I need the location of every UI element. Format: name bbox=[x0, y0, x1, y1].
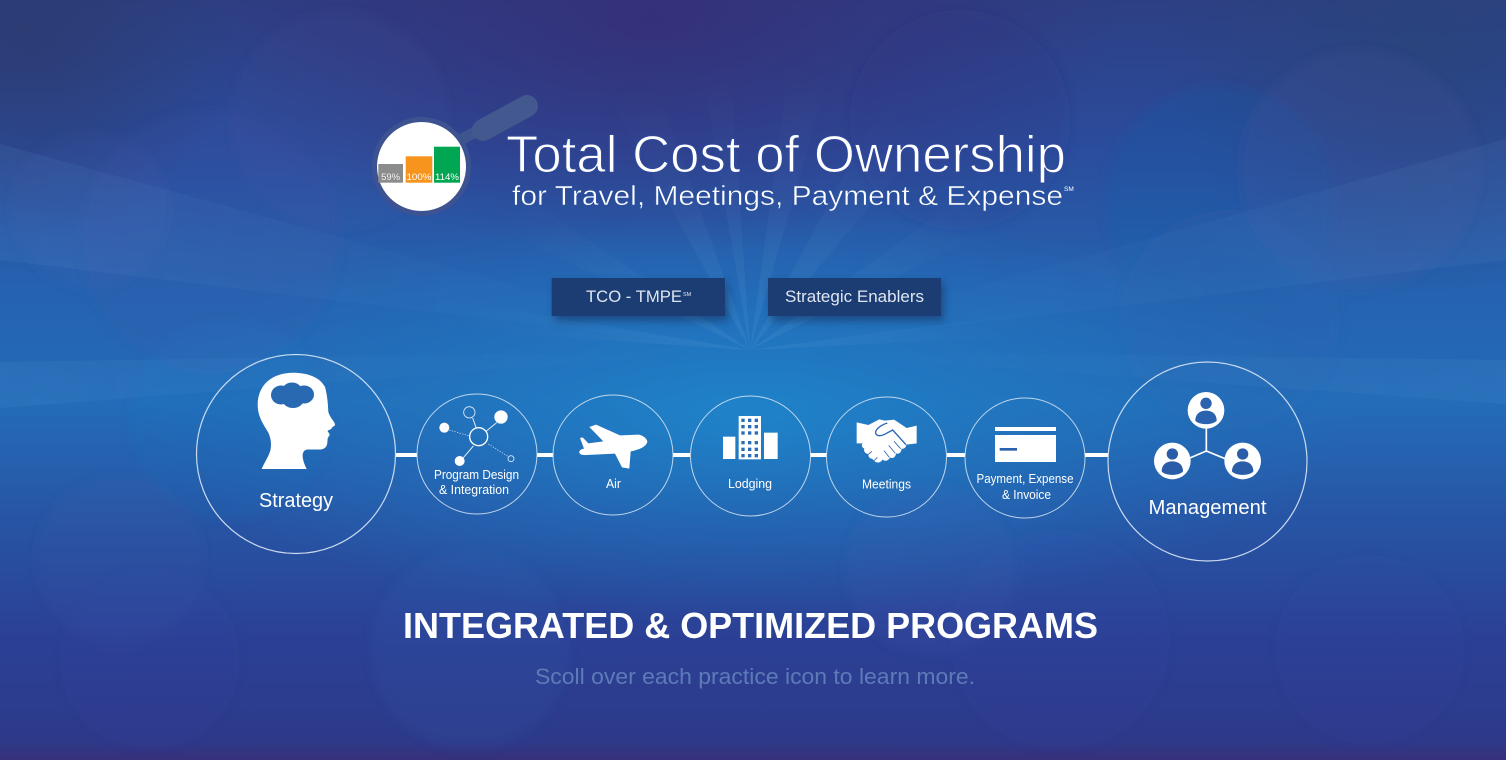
practice: Lodging bbox=[690, 396, 810, 516]
bar: 114% bbox=[434, 147, 460, 183]
practice: Program Design & Integration bbox=[417, 394, 537, 514]
label: Management: Management bbox=[1148, 497, 1267, 519]
button: TCO - TMPE: SM bbox=[683, 292, 692, 298]
label: Program Design & Integration: & Integration bbox=[439, 483, 509, 497]
magnifier lens bbox=[374, 120, 468, 214]
icon: airplane bbox=[579, 425, 647, 469]
icon: handshake bbox=[857, 419, 917, 463]
magnifier handle bbox=[455, 106, 527, 143]
label: Program Design & Integration: Program Design bbox=[434, 468, 519, 482]
connector line bbox=[396, 453, 1108, 457]
subtitle: for Travel, Meetings, Payment & Expense bbox=[512, 180, 1063, 211]
person: top bbox=[1188, 392, 1224, 429]
label: Air: Air bbox=[606, 477, 621, 491]
bar: 114%: 114% bbox=[435, 172, 460, 183]
button: Strategic Enablers bbox=[768, 278, 944, 321]
label: Program Design & Integration bbox=[434, 468, 519, 497]
icon: buildings bbox=[723, 416, 778, 459]
bar: 100%: 100% bbox=[406, 172, 432, 183]
label: Payment, Expense & Invoice: & Invoice bbox=[1002, 488, 1051, 502]
practice: Strategy bbox=[196, 354, 396, 554]
bar: 59% bbox=[378, 164, 403, 183]
title: Total Cost of Ownership bbox=[506, 126, 1066, 184]
icon: connected people bbox=[1154, 392, 1261, 479]
heading: INTEGRATED & OPTIMIZED PROGRAMS bbox=[403, 605, 1098, 646]
label: Lodging: Lodging bbox=[728, 477, 772, 491]
button: TCO - TMPE: TCO - TMPE bbox=[586, 287, 682, 306]
practice: Meetings bbox=[826, 397, 946, 517]
instruction text: Scoll over each practice icon to learn more. bbox=[535, 664, 975, 689]
light rays bbox=[0, 60, 1506, 408]
person: left bbox=[1154, 443, 1191, 479]
label: Payment, Expense & Invoice bbox=[976, 472, 1074, 502]
button: TCO - TMPE bbox=[552, 278, 728, 321]
person: right bbox=[1224, 443, 1261, 479]
label: Meetings: Meetings bbox=[862, 478, 911, 492]
icon: payment card bbox=[995, 427, 1056, 462]
icon: head with cloud bbox=[258, 373, 335, 469]
subtitle: SM bbox=[1064, 186, 1074, 193]
label: Payment, Expense & Invoice: Payment, Expense bbox=[976, 472, 1074, 486]
practice: Air bbox=[553, 395, 673, 515]
button: Strategic Enablers: Strategic Enablers bbox=[785, 287, 924, 306]
label: Strategy: Strategy bbox=[259, 490, 333, 512]
practice: Payment, Expense & Invoice bbox=[965, 398, 1085, 518]
magnifier logo bbox=[374, 106, 527, 214]
bar: 59%: 59% bbox=[381, 172, 401, 183]
practice: Management bbox=[1108, 362, 1307, 561]
icon: network nodes bbox=[439, 407, 514, 466]
bar: 100% bbox=[406, 156, 432, 183]
